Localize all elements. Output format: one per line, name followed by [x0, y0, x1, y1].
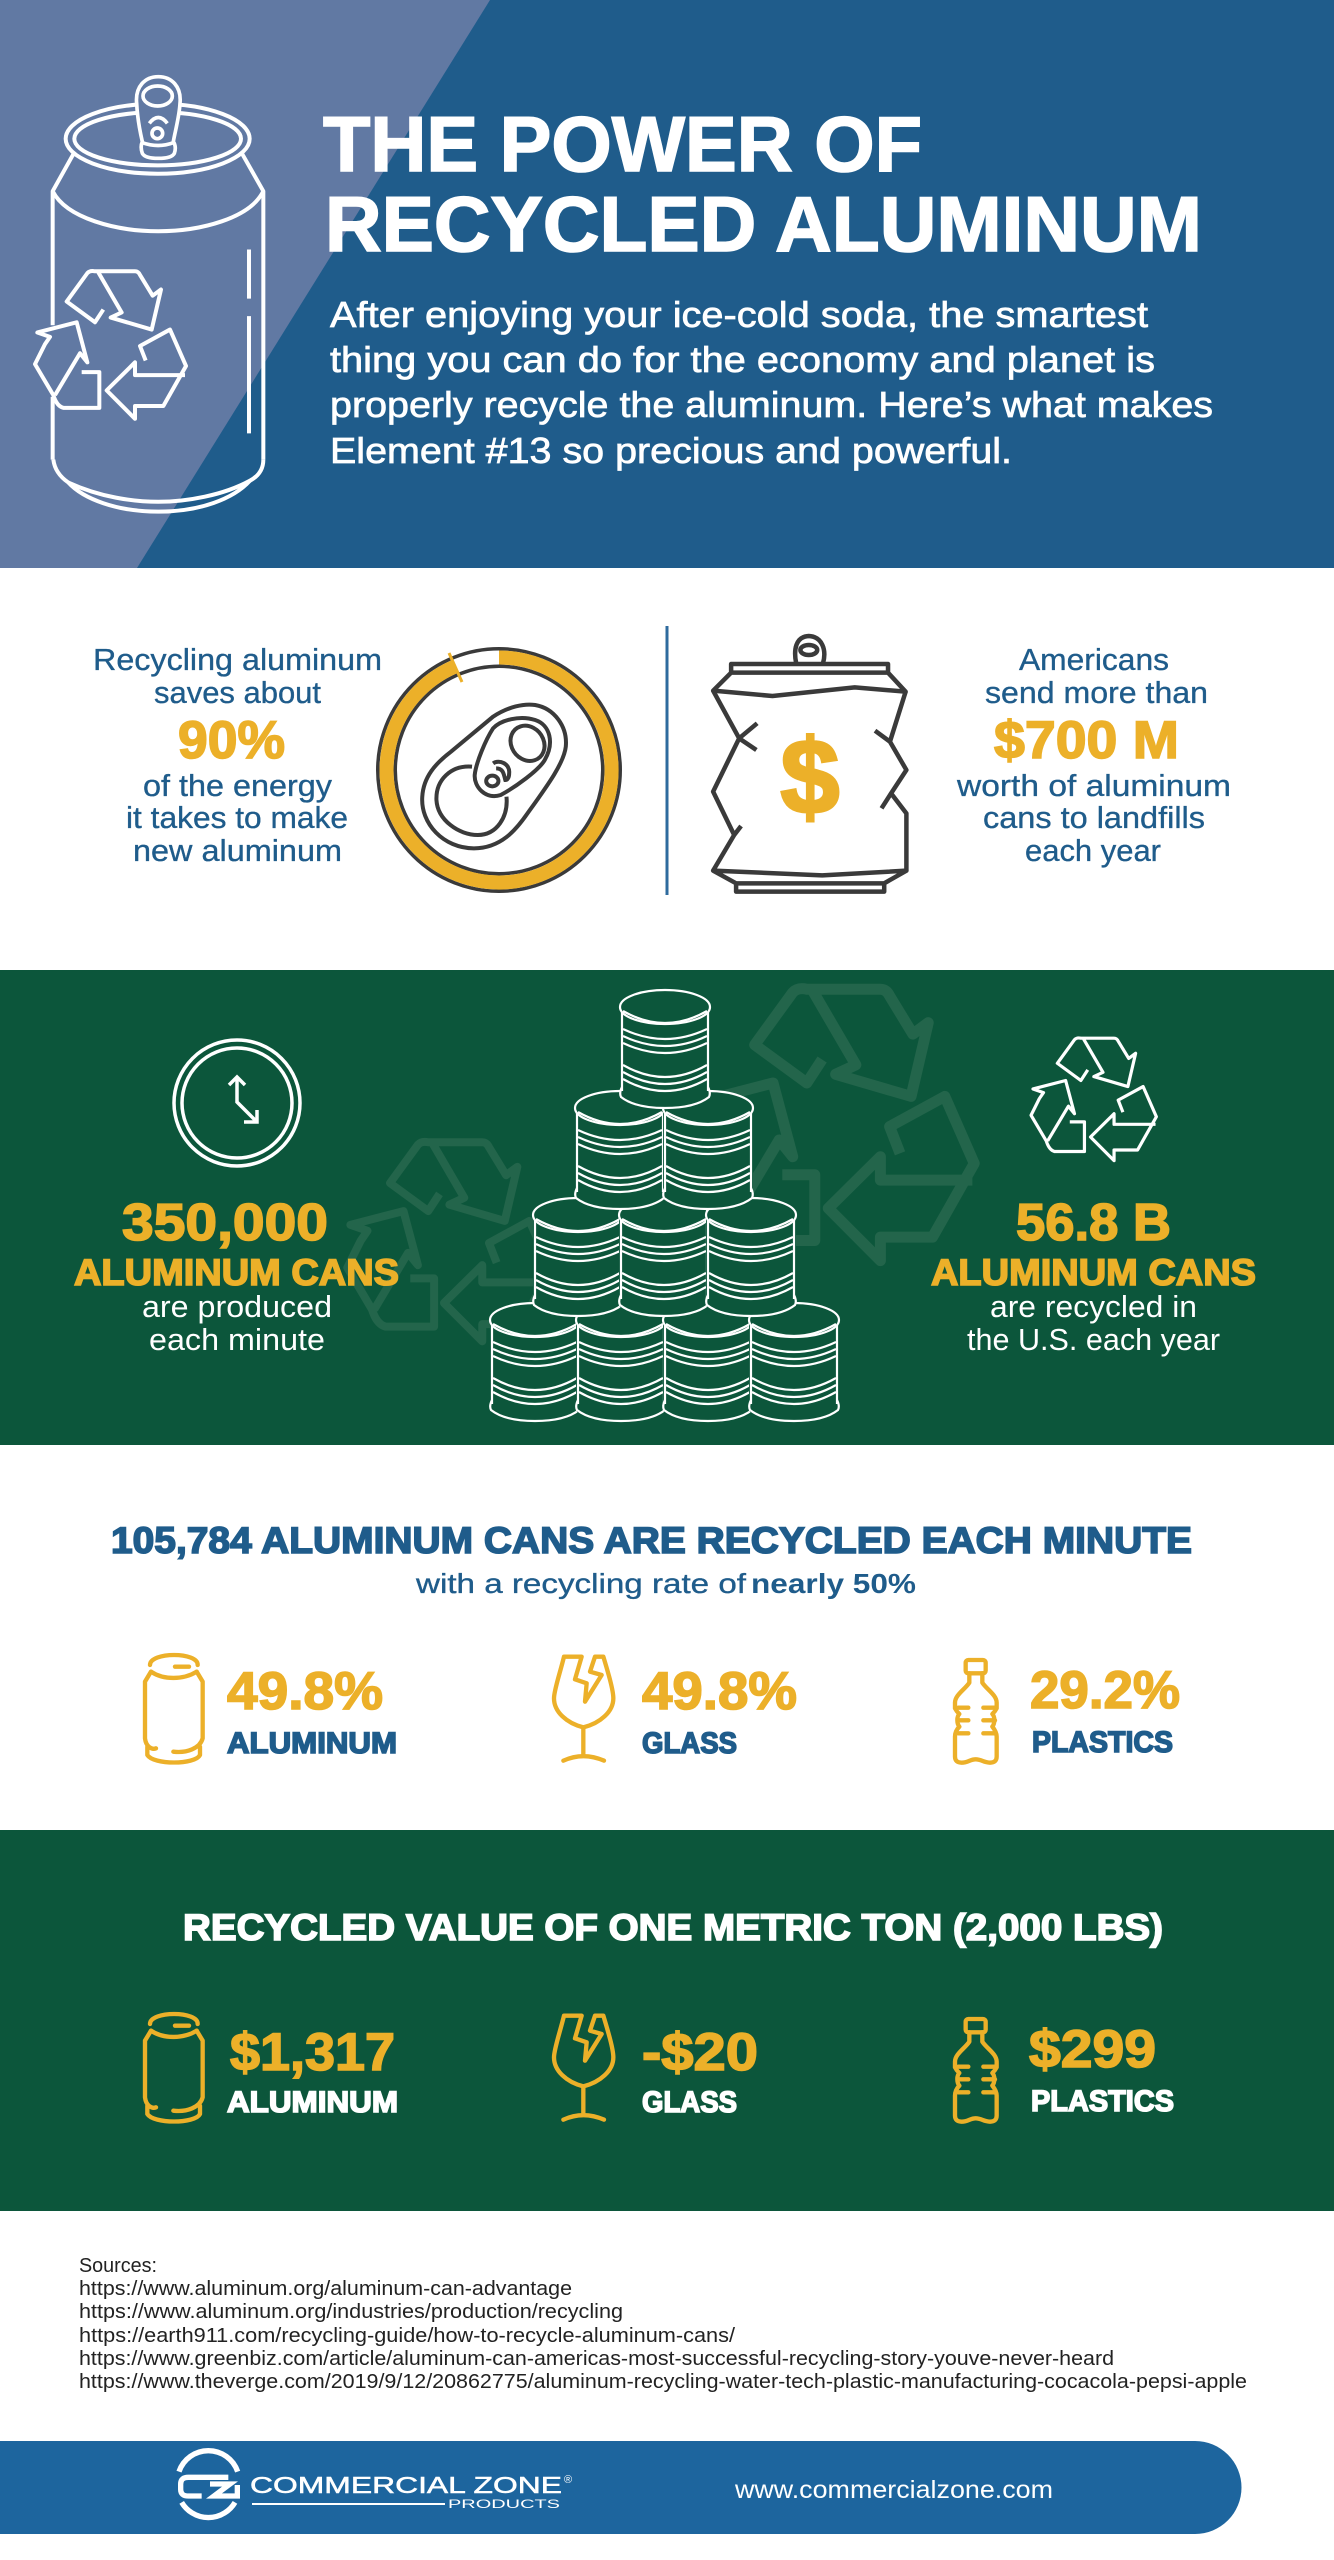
- heading: cans recycled each minute: with a recycling rate of: [415, 1568, 746, 1599]
- text: energy savings: of the energy: [143, 768, 333, 803]
- text: sources: https://www.greenbiz.com/article/aluminum-can-americas-most-successful-recycling-story-youve-never-heard: [79, 2348, 1114, 2370]
- heading: recycled value of one metric ton: RECYCLED VALUE OF ONE METRIC TON (2,000 LBS): [183, 1907, 1163, 1948]
- text: landfill cost: [956, 642, 1231, 868]
- panel: cans produced and recycled: [0, 970, 1334, 1445]
- icon: recycle symbol: [1031, 1038, 1156, 1161]
- stat: aluminum value: $1,317: [230, 2023, 395, 2082]
- text: energy savings: it takes to make: [126, 800, 348, 835]
- stat: glass value: -$20: [642, 2023, 758, 2082]
- stat: aluminum value: ALUMINUM: [227, 2086, 398, 2119]
- icon: crushed can with dollar sign: $: [781, 718, 839, 836]
- panel: recycling rates: [111, 1520, 1192, 1763]
- stat: plastics value: PLASTICS: [1031, 2085, 1174, 2118]
- text: cans recycled: are recycled in: [990, 1289, 1197, 1324]
- text: landfill cost: each year: [1025, 833, 1161, 868]
- panel: recycled value: [0, 1830, 1334, 2211]
- text: landfill cost: cans to landfills: [983, 800, 1205, 835]
- text: website: www.commercialzone.com: [734, 2476, 1053, 2504]
- icon: can top with 90 percent ring: [386, 653, 612, 882]
- text: cans recycled: 56.8 B: [1016, 1194, 1171, 1252]
- text: energy savings: saves about: [154, 675, 321, 710]
- icon: crushed can with dollar sign: [713, 636, 906, 892]
- text: energy savings: Recycling aluminum: [93, 642, 382, 677]
- text: sources: https://www.aluminum.org/aluminum-can-advantage: [79, 2278, 572, 2300]
- title: [323, 100, 1202, 268]
- stat: aluminum rate: 49.8%: [227, 1662, 383, 1721]
- logo: Commercial Zone Products: COMMERCIAL ZONE: [250, 2472, 562, 2498]
- text: sources: https://www.aluminum.org/industries/production/recycling: [79, 2301, 623, 2323]
- stat: aluminum rate: [145, 1655, 397, 1762]
- panel: header: [0, 0, 1334, 568]
- icon: clock: [174, 1040, 300, 1166]
- text: sources: [79, 2255, 1247, 2393]
- intro text: [330, 294, 1213, 471]
- text: landfill cost: Americans: [1019, 642, 1169, 677]
- stat: glass rate: GLASS: [642, 1727, 737, 1760]
- stat: plastics value: [955, 2019, 1174, 2122]
- intro text: After enjoying your ice-cold soda, the smartest: [330, 294, 1148, 335]
- text: energy savings: [93, 642, 382, 868]
- heading: cans recycled each minute: [111, 1520, 1192, 1599]
- intro text: thing you can do for the economy and planet is: [330, 339, 1155, 380]
- text: cans produced: are produced: [142, 1289, 332, 1324]
- text: sources: https://earth911.com/recycling-guide/how-to-recycle-aluminum-cans/: [79, 2325, 735, 2347]
- stat: aluminum value: [145, 2014, 398, 2121]
- stat: plastics rate: PLASTICS: [1032, 1726, 1173, 1759]
- stat: plastics rate: [955, 1660, 1180, 1763]
- stat: glass rate: 49.8%: [642, 1662, 797, 1721]
- text: cans produced: each minute: [149, 1322, 325, 1357]
- text: landfill cost: $700 M: [994, 711, 1179, 770]
- text: cans recycled: the U.S. each year: [967, 1322, 1220, 1357]
- intro text: Element #13 so precious and powerful.: [330, 430, 1012, 471]
- text: sources: https://www.theverge.com/2019/9/12/20862775/aluminum-recycling-water-tech-plastic-manufacturing-cocacola-pepsi-apple: [79, 2371, 1247, 2393]
- text: cans recycled: [931, 1194, 1256, 1357]
- divider: [666, 626, 668, 895]
- text: cans produced: ALUMINUM CANS: [74, 1252, 399, 1293]
- panel: footer bar: [0, 2441, 1242, 2534]
- heading: cans recycled each minute: nearly 50%: [751, 1568, 916, 1599]
- stat: plastics rate: 29.2%: [1030, 1661, 1180, 1720]
- text: landfill cost: send more than: [985, 675, 1208, 710]
- text: landfill cost: worth of aluminum: [956, 768, 1231, 803]
- icon: small watermark recycle symbol: [347, 1142, 551, 1341]
- logo: Commercial Zone Products: [179, 2451, 572, 2518]
- intro text: properly recycle the aluminum. Here’s what makes: [330, 384, 1213, 425]
- stat: aluminum rate: ALUMINUM: [227, 1727, 397, 1760]
- panel: energy and landfill facts: [93, 626, 1231, 895]
- icon: aluminum can with recycle symbol: [35, 77, 263, 512]
- logo: Commercial Zone Products: ®: [564, 2474, 572, 2486]
- text: cans produced: [74, 1194, 399, 1357]
- text: sources: Sources:: [79, 2255, 157, 2277]
- stat: glass value: [554, 2016, 758, 2120]
- title: THE POWER OF: [323, 100, 922, 188]
- text: cans recycled: ALUMINUM CANS: [931, 1252, 1256, 1293]
- title: RECYCLED ALUMINUM: [325, 180, 1202, 268]
- heading: cans recycled each minute: 105,784 ALUMINUM CANS ARE RECYCLED EACH MINUTE: [111, 1520, 1192, 1561]
- stat: glass rate: [554, 1657, 797, 1761]
- text: energy savings: 90%: [178, 711, 285, 770]
- stat: plastics value: $299: [1029, 2020, 1156, 2079]
- text: energy savings: new aluminum: [133, 833, 342, 868]
- stat: glass value: GLASS: [642, 2086, 737, 2119]
- icon: large watermark recycle symbol: [696, 989, 974, 1261]
- logo: Commercial Zone Products: PRODUCTS: [448, 2497, 560, 2511]
- text: cans produced: 350,000: [122, 1194, 328, 1252]
- illustration: pyramid of cans: [490, 990, 839, 1421]
